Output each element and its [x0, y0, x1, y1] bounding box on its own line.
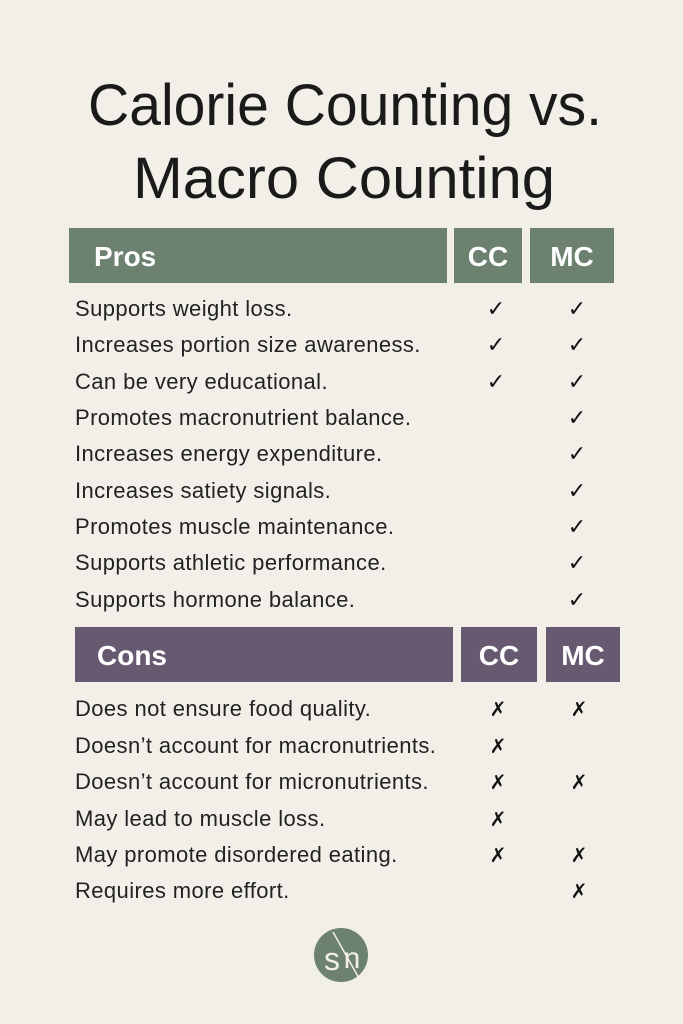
cons crosses: ✗ [490, 736, 506, 758]
cons crosses: ✗ [490, 809, 506, 831]
pros checkmarks: ✓ [487, 296, 505, 321]
cons crosses: ✗ [490, 772, 506, 794]
pros checkmarks: ✓ [568, 296, 586, 321]
logo [314, 928, 368, 982]
pros list: Increases portion size awareness. [75, 332, 421, 357]
cons crosses: ✗ [490, 699, 506, 721]
cons list [75, 696, 436, 903]
pros header: CC [468, 241, 508, 272]
cons header [75, 627, 620, 682]
cons list: Doesn’t account for micronutrients. [75, 769, 429, 794]
cons list: May promote disordered eating. [75, 842, 398, 867]
pros list: Promotes macronutrient balance. [75, 405, 411, 430]
logo: s [324, 941, 340, 977]
pros checkmarks: ✓ [568, 332, 586, 357]
cons header: MC [561, 640, 605, 671]
pros checkmarks: ✓ [487, 369, 505, 394]
title: Macro Counting [133, 146, 555, 211]
pros list: Supports hormone balance. [75, 587, 355, 612]
pros list: Promotes muscle maintenance. [75, 514, 394, 539]
pros checkmarks: ✓ [568, 441, 586, 466]
pros checkmarks: ✓ [568, 405, 586, 430]
cons crosses: ✗ [571, 772, 587, 794]
pros list: Can be very educational. [75, 369, 328, 394]
cons crosses: ✗ [571, 881, 587, 903]
cons crosses: ✗ [490, 845, 506, 867]
pros checkmarks: ✓ [568, 514, 586, 539]
pros checkmarks: ✓ [568, 550, 586, 575]
cons crosses: ✗ [571, 845, 587, 867]
pros list [75, 296, 421, 612]
pros checkmarks: ✓ [568, 369, 586, 394]
cons header: CC [479, 640, 519, 671]
pros list: Supports weight loss. [75, 296, 293, 321]
title [88, 73, 602, 211]
pros checkmarks: ✓ [487, 332, 505, 357]
pros header [69, 228, 614, 283]
logo: n [344, 942, 360, 975]
pros list: Increases satiety signals. [75, 478, 331, 503]
pros header: MC [550, 241, 594, 272]
pros checkmarks [487, 296, 586, 612]
cons header: Cons [97, 640, 167, 671]
cons list: Requires more effort. [75, 878, 290, 903]
title: Calorie Counting vs. [88, 73, 602, 138]
cons list: Doesn’t account for macronutrients. [75, 733, 436, 758]
pros header: Pros [94, 241, 156, 272]
pros checkmarks: ✓ [568, 587, 586, 612]
cons crosses: ✗ [571, 699, 587, 721]
cons crosses [490, 699, 587, 903]
pros list: Supports athletic performance. [75, 550, 387, 575]
cons list: May lead to muscle loss. [75, 806, 325, 831]
pros list: Increases energy expenditure. [75, 441, 383, 466]
cons list: Does not ensure food quality. [75, 696, 371, 721]
pros checkmarks: ✓ [568, 478, 586, 503]
